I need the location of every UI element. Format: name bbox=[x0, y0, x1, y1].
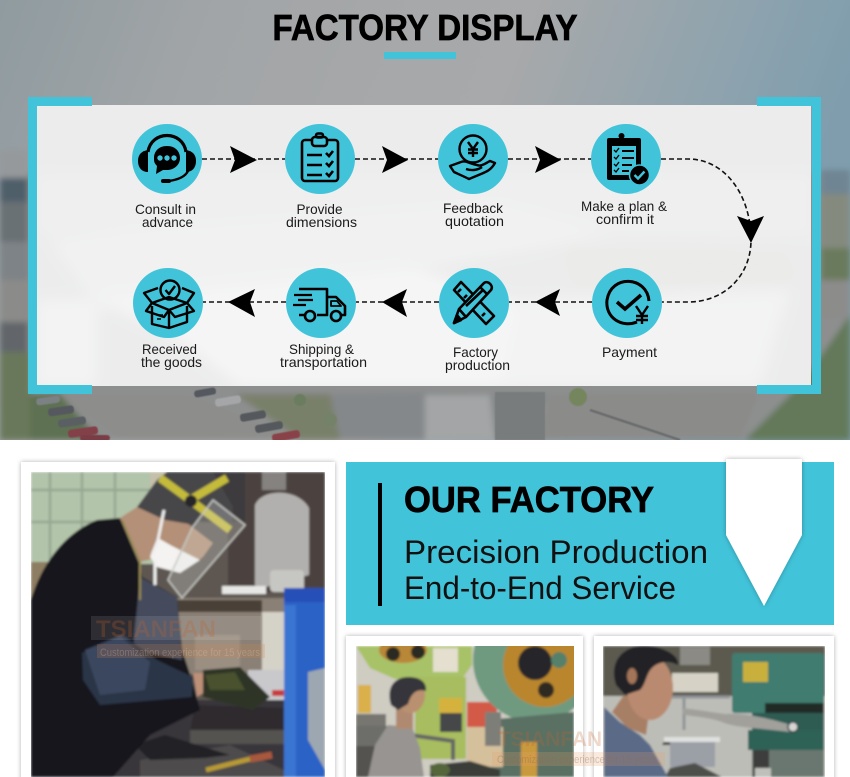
icon: clipboard checklist bbox=[302, 134, 338, 181]
label: Factory bbox=[453, 344, 498, 360]
aerial factory background bbox=[0, 0, 850, 442]
photo card: drill press operator bbox=[594, 636, 834, 777]
label: Shipping & bbox=[289, 341, 355, 357]
watermark across lower photos bbox=[492, 728, 665, 766]
title underline bbox=[384, 52, 456, 59]
label: Payment bbox=[602, 344, 657, 360]
white lower section bbox=[0, 440, 850, 777]
label: Received bbox=[142, 341, 197, 357]
step: provide dimensions bbox=[285, 124, 357, 230]
banner subheading: End-to-End Service bbox=[404, 570, 676, 606]
banner: our factory bbox=[346, 459, 834, 625]
arrowheads bbox=[228, 146, 764, 317]
label: Provide bbox=[296, 201, 343, 217]
translucent panel bbox=[37, 105, 811, 386]
label: Feedback bbox=[443, 200, 504, 216]
step: consult in advance bbox=[132, 124, 202, 230]
step: payment bbox=[592, 268, 662, 360]
icon: headset chat bbox=[138, 136, 196, 183]
label: Consult in bbox=[135, 201, 196, 217]
step: shipping and transportation bbox=[280, 268, 367, 370]
label: dimensions bbox=[286, 214, 357, 230]
banner heading: OUR FACTORY bbox=[404, 479, 654, 520]
photo card: press machine operator bbox=[343, 633, 586, 777]
corner brackets bbox=[32, 102, 816, 390]
label: confirm it bbox=[596, 211, 654, 227]
banner subheading: Precision Production bbox=[404, 534, 708, 570]
watermark: TSIANFAN bbox=[96, 616, 216, 643]
watermark: Customization experience for 15 years bbox=[100, 647, 260, 659]
parked cars bbox=[36, 395, 60, 406]
icon: hand with yen coin bbox=[450, 136, 495, 179]
photo card: worker with face shield bbox=[21, 462, 335, 777]
vertical accent bar bbox=[378, 483, 382, 606]
watermark across lower photos: TSIANFAN bbox=[498, 728, 602, 751]
panel: process flow bbox=[32, 102, 816, 390]
label: transportation bbox=[280, 354, 367, 370]
step: received the goods bbox=[133, 268, 203, 370]
icon: check with yen bbox=[607, 281, 649, 324]
building beneath translucent panel bbox=[37, 105, 811, 386]
watermark across lower photos: Customization experience for 15 years bbox=[497, 754, 657, 766]
icon: open box with check bbox=[144, 280, 194, 328]
label: production bbox=[445, 357, 510, 373]
watermark bbox=[91, 616, 265, 659]
label: quotation bbox=[445, 213, 504, 229]
step: make a plan and confirm it bbox=[581, 124, 668, 227]
white ribbon tag bbox=[726, 459, 802, 606]
icon: pencil and ruler bbox=[454, 282, 494, 324]
connector lines bbox=[202, 159, 751, 302]
label: the goods bbox=[141, 354, 202, 370]
shirt body bbox=[31, 518, 200, 777]
title: FACTORY DISPLAY bbox=[272, 7, 578, 48]
label: advance bbox=[142, 214, 193, 230]
label: Make a plan & bbox=[581, 198, 668, 214]
icon: delivery truck bbox=[293, 289, 345, 321]
step: factory production bbox=[439, 268, 510, 373]
step: feedback quotation bbox=[438, 124, 508, 229]
icon: solid clipboard with check bbox=[607, 133, 650, 185]
